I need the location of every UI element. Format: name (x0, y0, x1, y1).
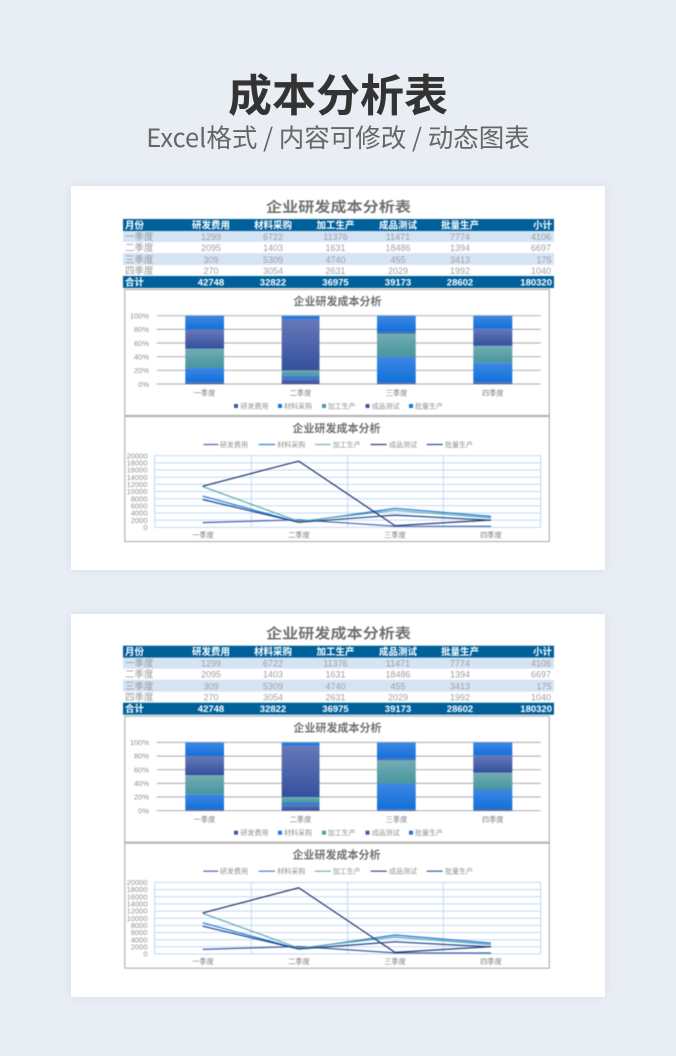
cost table: 小计 (533, 220, 552, 232)
cost table: 2631 (325, 266, 346, 276)
cost table: 批量生产 (441, 646, 479, 658)
cost table: 39173 (385, 704, 411, 715)
cost table: 2095 (201, 670, 221, 680)
cost table: 36975 (322, 704, 349, 715)
cost table: 6697 (531, 670, 551, 680)
stacked bar chart (125, 290, 549, 416)
line chart: 二季度 (288, 957, 310, 966)
line chart: 0 (143, 950, 148, 959)
cost table: 11376 (323, 232, 348, 242)
line chart: 4000 (131, 935, 148, 944)
cost table: 32822 (260, 704, 286, 715)
cost table: 一季度 (125, 658, 154, 670)
cost table: 270 (203, 693, 219, 703)
line chart: 20000 (127, 452, 148, 460)
cost table: 一季度 (125, 231, 154, 243)
line chart: 20000 (127, 878, 148, 887)
line chart: 材料采购 (277, 440, 305, 449)
cost table: 7774 (450, 232, 470, 242)
line chart: 12000 (127, 907, 148, 916)
stacked bar chart (125, 716, 549, 842)
stacked bar chart: 企业研发成本分析 (294, 721, 382, 735)
cost table: 2029 (388, 266, 408, 276)
stacked bar chart: 40% (134, 352, 149, 362)
table heading: 企业研发成本分析表 (266, 626, 411, 642)
stacked bar chart: 加工生产 (328, 828, 356, 837)
cost table: 18486 (385, 670, 411, 680)
line chart: 18000 (127, 885, 148, 894)
cost table: 309 (203, 255, 219, 265)
stacked bar chart: 100% (130, 738, 149, 747)
stacked bar chart: 0% (138, 380, 149, 389)
line chart: 二季度 (288, 530, 310, 540)
cost table: 1394 (450, 670, 470, 680)
cost table: 42748 (198, 704, 224, 715)
line chart: 18000 (127, 458, 148, 468)
cost table: 180320 (520, 704, 552, 715)
cost table: 三季度 (125, 254, 154, 266)
cost table: 175 (536, 682, 552, 692)
line chart: 一季度 (192, 957, 214, 966)
stacked bar chart: 加工生产 (328, 402, 356, 410)
cost table: 研发费用 (192, 220, 230, 232)
stacked bar chart: 材料采购 (284, 828, 312, 837)
cost table: 月份 (125, 646, 145, 658)
stacked bar chart: 四季度 (482, 388, 504, 398)
panel: top spreadsheet card (71, 186, 605, 570)
cost table: 5309 (263, 682, 283, 692)
cost table: 455 (390, 255, 406, 265)
cost table: 1631 (325, 670, 346, 680)
cost table: 1403 (263, 243, 283, 253)
line chart: 10000 (127, 914, 148, 923)
panel: bottom spreadsheet card (71, 614, 605, 997)
line chart: 14000 (127, 900, 148, 909)
line chart: 4000 (131, 509, 148, 518)
line chart: 6000 (131, 928, 148, 937)
stacked bar chart: 成品测试 (372, 402, 400, 410)
cost table: 1040 (531, 266, 551, 276)
line chart: 批量生产 (445, 867, 473, 876)
line chart: 成品测试 (389, 867, 417, 876)
line chart: 14000 (127, 473, 148, 482)
cost table: 18486 (385, 243, 411, 253)
cost table: 2029 (388, 693, 408, 703)
cost table: 成品测试 (379, 646, 417, 658)
stacked bar chart: 80% (134, 325, 149, 334)
stacked bar chart: 20% (134, 366, 149, 375)
line chart: 8000 (131, 921, 148, 930)
line chart: 研发费用 (220, 867, 248, 876)
cost table (123, 219, 554, 288)
cost table: 3054 (263, 693, 283, 703)
stacked bar chart: 批量生产 (415, 828, 443, 837)
cost table: 270 (203, 266, 219, 276)
line chart: 8000 (131, 494, 148, 503)
cost table: 批量生产 (441, 220, 479, 232)
line chart: 成品测试 (389, 440, 417, 449)
stacked bar chart: 80% (134, 752, 149, 761)
line chart: 加工生产 (333, 440, 361, 449)
cost table: 39173 (385, 278, 411, 288)
line chart: 企业研发成本分析 (292, 848, 380, 862)
table heading: 企业研发成本分析表 (266, 199, 411, 215)
cost table: 研发费用 (192, 646, 230, 658)
cost table: 42748 (198, 278, 224, 288)
stacked bar chart: 研发费用 (240, 828, 268, 837)
cost table: 4740 (325, 255, 346, 265)
cost table: 28602 (447, 278, 473, 288)
cost table: 455 (390, 682, 406, 692)
cost table: 成品测试 (379, 220, 417, 232)
cost table: 二季度 (125, 242, 154, 254)
line chart: 2000 (131, 942, 148, 952)
title: 成本分析表 (228, 60, 448, 124)
cost table: 小计 (533, 646, 552, 658)
cost table: 3054 (263, 266, 283, 276)
cost table: 309 (203, 682, 219, 692)
line chart: 批量生产 (445, 440, 473, 449)
line chart: 研发费用 (220, 440, 248, 449)
stacked bar chart: 0% (138, 807, 149, 816)
line chart: 三季度 (384, 530, 406, 540)
cost table: 3413 (450, 682, 470, 692)
cost table: 三季度 (125, 681, 154, 693)
line chart: 2000 (131, 516, 148, 525)
line chart: 企业研发成本分析 (292, 421, 380, 435)
cost table: 材料采购 (254, 220, 292, 232)
line chart: 16000 (127, 892, 148, 901)
cost table: 材料采购 (254, 646, 292, 658)
cost table: 28602 (447, 704, 473, 715)
cost table: 32822 (260, 278, 286, 288)
cost table (123, 646, 554, 715)
stacked bar chart: 60% (134, 766, 149, 775)
cost table: 1631 (325, 243, 346, 253)
cost table: 月份 (125, 220, 145, 232)
line chart (125, 416, 549, 542)
cost table: 四季度 (125, 692, 154, 704)
stacked bar chart: 三季度 (386, 815, 407, 824)
cost table: 6697 (531, 243, 551, 253)
cost table: 4106 (531, 659, 551, 669)
stacked bar chart: 100% (130, 312, 149, 320)
line chart: 四季度 (480, 957, 502, 966)
cost table: 175 (536, 255, 552, 265)
cost table: 1299 (201, 232, 221, 242)
stacked bar chart: 二季度 (290, 815, 311, 824)
cost table: 11471 (386, 232, 410, 242)
cost table: 180320 (520, 278, 552, 288)
stacked bar chart: 材料采购 (284, 402, 312, 410)
cost table: 2631 (325, 693, 346, 703)
stacked bar chart: 一季度 (194, 815, 215, 824)
line chart: 加工生产 (333, 867, 361, 876)
cost table: 二季度 (125, 669, 154, 681)
cost table: 合计 (125, 276, 145, 288)
cost table: 6722 (263, 659, 283, 669)
line chart: 6000 (131, 502, 148, 510)
cost table: 加工生产 (316, 646, 355, 658)
cost table: 1992 (450, 266, 470, 276)
cost table: 6722 (263, 232, 283, 242)
cost table: 4106 (531, 232, 551, 242)
cost table: 7774 (450, 659, 470, 669)
stacked bar chart: 批量生产 (415, 402, 443, 410)
line chart: 材料采购 (277, 867, 305, 876)
line chart (125, 843, 549, 968)
cost table: 1403 (263, 670, 283, 680)
stacked bar chart: 企业研发成本分析 (294, 294, 382, 308)
line chart: 0 (143, 523, 148, 532)
stacked bar chart: 研发费用 (240, 402, 268, 410)
line chart: 四季度 (480, 530, 502, 540)
cost table: 合计 (125, 703, 145, 715)
cost table: 加工生产 (316, 220, 355, 232)
stacked bar chart: 二季度 (290, 388, 311, 398)
line chart: 一季度 (192, 530, 214, 540)
stacked bar chart: 40% (134, 779, 149, 788)
stacked bar chart: 四季度 (482, 815, 504, 824)
cost table: 2095 (201, 243, 221, 253)
line chart: 10000 (127, 487, 148, 496)
cost table: 四季度 (125, 265, 154, 277)
stacked bar chart: 成品测试 (372, 828, 400, 837)
cost table: 1040 (531, 693, 551, 703)
cost table: 11471 (386, 659, 410, 669)
stacked bar chart: 20% (134, 793, 149, 802)
cost table: 5309 (263, 255, 283, 265)
stacked bar chart: 60% (134, 339, 149, 348)
cost table: 11376 (323, 659, 348, 669)
line chart: 12000 (127, 480, 148, 489)
stacked bar chart: 三季度 (386, 388, 407, 398)
line chart: 三季度 (384, 957, 406, 966)
cost table: 1394 (450, 243, 470, 253)
stacked bar chart: 一季度 (194, 388, 215, 398)
cost table: 3413 (450, 255, 470, 265)
cost table: 1299 (201, 659, 221, 669)
cost table: 4740 (325, 682, 346, 692)
line chart: 16000 (127, 466, 148, 475)
subtitle: Excel格式 / 内容可修改 / 动态图表 (146, 118, 530, 155)
cost table: 36975 (322, 278, 349, 288)
cost table: 1992 (450, 693, 470, 703)
